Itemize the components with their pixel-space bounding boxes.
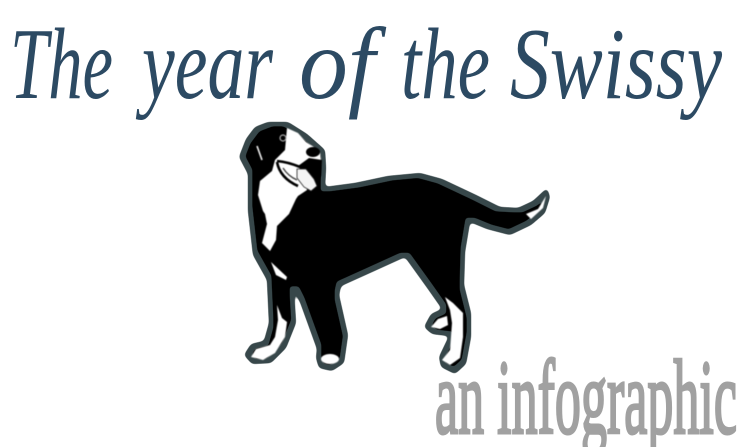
rear paw <box>442 297 463 365</box>
mouth interior <box>298 158 322 182</box>
dog markings <box>251 128 546 365</box>
tongue <box>297 169 317 191</box>
eye <box>280 135 286 141</box>
lips and jaw lines <box>277 161 300 186</box>
nose <box>306 147 320 157</box>
title: year <box>135 8 273 121</box>
title: of <box>299 8 387 121</box>
right front paw <box>321 354 339 364</box>
title: the <box>401 8 490 121</box>
title: The <box>10 8 113 121</box>
foreleg streak <box>271 262 287 280</box>
ear highlight <box>257 146 262 160</box>
title <box>10 8 723 121</box>
left front paw <box>251 305 287 360</box>
white chest and face blaze <box>258 128 321 251</box>
icon: Swissy dog illustration <box>239 122 550 374</box>
far rear paw <box>431 316 448 329</box>
tail tip <box>526 196 546 219</box>
dog body silhouette <box>239 122 550 374</box>
